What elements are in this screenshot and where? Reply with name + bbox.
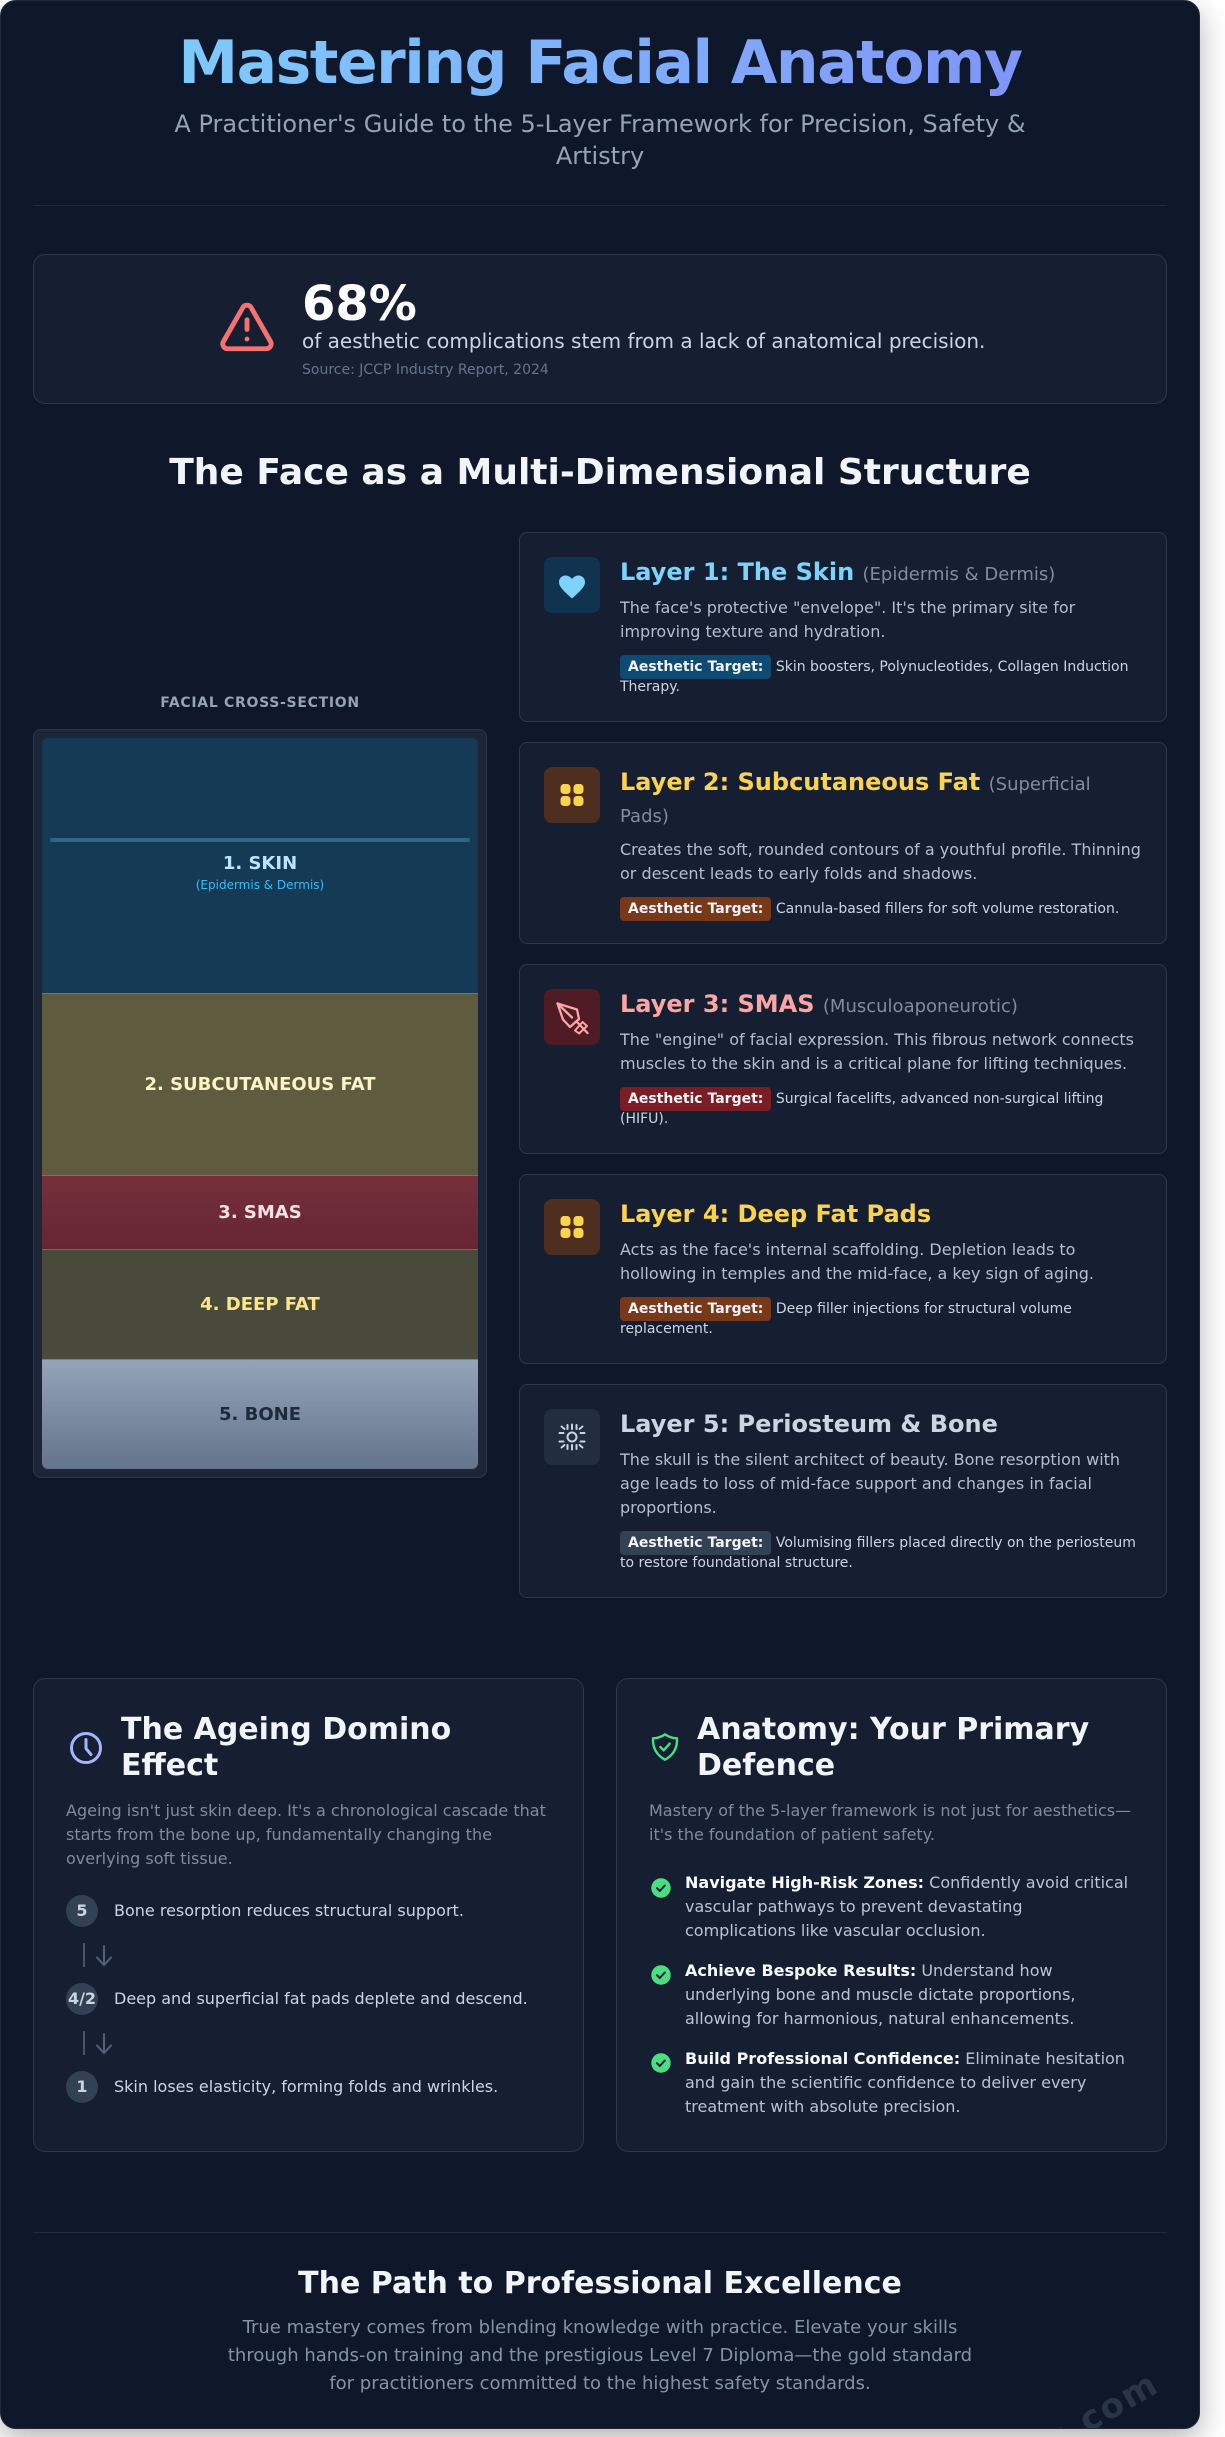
- icon: pen nib: [544, 989, 600, 1045]
- step 5 badge: 5: [76, 1901, 88, 1920]
- footer text: [228, 2317, 972, 2394]
- stat value: 68%: [302, 276, 417, 332]
- layer 3 description: The "engine" of facial expression. This fibrous network connects muscles to the skin and is a critical plane for lifting techniques.: [620, 1030, 1134, 1073]
- layer 1: skin: (Epidermis & Dermis): [196, 878, 324, 892]
- step 4/2 badge: [66, 1983, 98, 2015]
- arrow: step 4/2 to 1: [83, 2031, 112, 2055]
- icon: bone radial: [544, 1409, 600, 1465]
- icon: clock: [70, 1732, 102, 1764]
- step 1 text: Skin loses elasticity, forming folds and wrinkles.: [114, 2077, 498, 2096]
- icon: warning triangle: [220, 302, 274, 352]
- card: layer 1 skin: [519, 532, 1167, 722]
- icon: shield check: [652, 1733, 678, 1761]
- panel: facial cross-section diagram: [33, 729, 487, 1478]
- footer heading: The Path to Professional Excellence: [298, 2266, 902, 2301]
- subtitle: A Practitioner's Guide to the 5-Layer Framework for Precision, Safety &: [174, 110, 1026, 138]
- layer 4 target: Aesthetic Target: Deep filler injections for structural volume replacement.: [620, 1301, 1072, 1337]
- panel: ageing domino effect: [33, 1678, 584, 2152]
- layer 1 description: The face's protective "envelope". It's the primary site for improving texture and hydration.: [620, 598, 1075, 641]
- benefit 1: Navigate High-Risk Zones: Confidently avoid critical vascular pathways to prevent devastating complications like vascular occlusion.: [685, 1873, 1128, 1940]
- layer 5 title: Layer 5: Periosteum & Bone: [620, 1410, 998, 1438]
- step 1 badge: [66, 2071, 98, 2103]
- subtitle: Artistry: [556, 142, 644, 170]
- layer 3 title: Layer 3: SMAS (Musculoaponeurotic): [620, 990, 1018, 1018]
- layer 3: SMAS: [42, 1175, 478, 1249]
- layer 5: bone: 5. BONE: [219, 1404, 301, 1425]
- footer text: for practitioners committed to the highest safety standards.: [329, 2373, 871, 2394]
- cross-section label: FACIAL CROSS-SECTION: [160, 695, 360, 711]
- layer 5 target: Aesthetic Target: Volumising fillers placed directly on the periosteum to restore foundational structure.: [620, 1535, 1136, 1571]
- card: layer 2 subcutaneous fat: [519, 742, 1167, 944]
- layer 4: deep fat: [42, 1249, 478, 1359]
- layer 3 target: Aesthetic Target: Surgical facelifts, advanced non-surgical lifting (HIFU).: [620, 1091, 1103, 1127]
- arrow: step 5 to 4/2: [83, 1943, 112, 1967]
- intro text: Ageing isn't just skin deep. It's a chronological cascade that starts from the bone up, fundamentally changing the overlying soft tissue.: [66, 1801, 546, 1868]
- layer 2 description: Creates the soft, rounded contours of a youthful profile. Thinning or descent leads to early folds and shadows.: [620, 840, 1141, 883]
- step 1 badge: 1: [76, 2077, 88, 2096]
- benefit 2: Achieve Bespoke Results: Understand how underlying bone and muscle dictate proportions, allowing for harmonious, natural enhancements.: [685, 1961, 1075, 2028]
- layer 3: SMAS: 3. SMAS: [218, 1202, 302, 1223]
- title: Mastering Facial Anatomy: [178, 28, 1022, 98]
- stat source: Source: JCCP Industry Report, 2024: [302, 362, 549, 378]
- layer 5 description: The skull is the silent architect of beauty. Bone resorption with age leads to loss of mid-face support and changes in facial proportions.: [620, 1450, 1120, 1517]
- section heading: The Face as a Multi-Dimensional Structure: [169, 452, 1031, 493]
- icon: fat pads: [544, 767, 600, 823]
- card: layer 5 periosteum and bone: [519, 1384, 1167, 1598]
- check icon 2: [651, 1965, 671, 1985]
- icon: fat pads: [544, 1199, 600, 1255]
- layer 4 description: Acts as the face's internal scaffolding. Depletion leads to hollowing in temples and the mid-face, a key sign of aging.: [620, 1240, 1094, 1283]
- layer 2: subcutaneous fat: 2. SUBCUTANEOUS FAT: [144, 1074, 376, 1095]
- step 4/2 badge: 4/2: [68, 1989, 96, 2008]
- card: layer 3 SMAS: [519, 964, 1167, 1154]
- heading: Anatomy: Your Primary Defence: [697, 1712, 1089, 1783]
- layer 2 target: Aesthetic Target: Cannula-based fillers for soft volume restoration.: [628, 901, 1119, 917]
- check icon 1: [651, 1878, 671, 1898]
- layer 2: subcutaneous fat: [42, 993, 478, 1175]
- layer 1: skin: [42, 738, 478, 993]
- step 4/2 text: Deep and superficial fat pads deplete and descend.: [114, 1989, 528, 2008]
- step 5 badge: [66, 1895, 98, 1927]
- layer 5: bone: [42, 1359, 478, 1469]
- layer 1 title: Layer 1: The Skin (Epidermis & Dermis): [620, 558, 1055, 586]
- subtitle: [174, 110, 1026, 170]
- heading: The Ageing Domino Effect: [121, 1712, 451, 1783]
- card: layer 4 deep fat: [519, 1174, 1167, 1364]
- layer 1 target: Aesthetic Target: Skin boosters, Polynucleotides, Collagen Induction Therapy.: [620, 659, 1128, 695]
- layer 4 title: Layer 4: Deep Fat Pads: [620, 1200, 931, 1228]
- check icon 3: [651, 2053, 671, 2073]
- layer 1: skin: 1. SKIN: [223, 853, 297, 874]
- intro text: Mastery of the 5-layer framework is not just for aesthetics—it's the foundation of patient safety.: [649, 1801, 1131, 1844]
- icon: heart: [544, 557, 600, 613]
- layer 2 title: Layer 2: Subcutaneous Fat (Superficial Pads): [620, 768, 1091, 827]
- step 5 text: Bone resorption reduces structural support.: [114, 1901, 464, 1920]
- layer 4: deep fat: 4. DEEP FAT: [200, 1294, 320, 1315]
- footer text: True mastery comes from blending knowledge with practice. Elevate your skills: [243, 2317, 957, 2338]
- panel: anatomy primary defence: [616, 1678, 1167, 2152]
- benefit 3: Build Professional Confidence: Eliminate hesitation and gain the scientific confidence to deliver every treatment with absolute precision.: [685, 2049, 1125, 2116]
- stat panel: 68%: [33, 254, 1167, 404]
- stat description: of aesthetic complications stem from a lack of anatomical precision.: [302, 329, 985, 353]
- footer text: through hands-on training and the prestigious Level 7 Diploma—the gold standard: [228, 2345, 972, 2366]
